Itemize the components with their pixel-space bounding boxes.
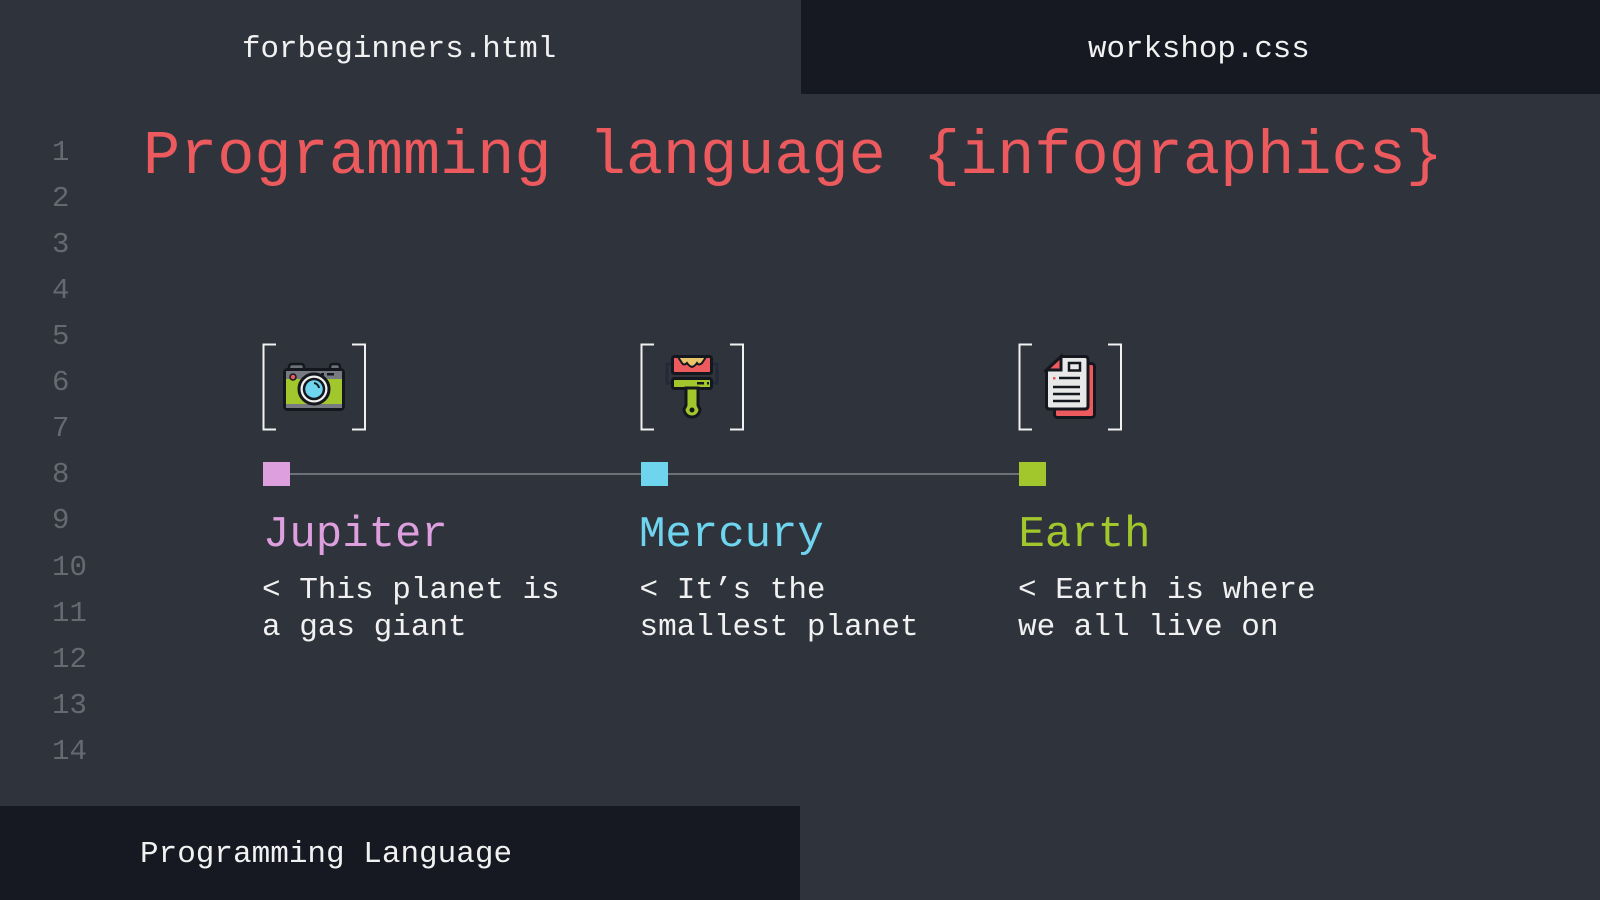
line numbers: 3 (52, 228, 70, 261)
footer label: Programming Language (140, 837, 512, 872)
icon: documents (1043, 353, 1096, 419)
line numbers: 12 (52, 643, 87, 676)
timeline connector (290, 473, 1020, 475)
line numbers: 13 (52, 689, 87, 722)
line numbers: 9 (52, 504, 70, 537)
tab: workshop.css (inactive, dark) (801, 0, 1600, 94)
line numbers: 6 (52, 366, 70, 399)
text: Jupiter description: < This planet is a gas giant (262, 572, 560, 645)
line numbers: 5 (52, 320, 70, 353)
tab label: workshop.css: workshop.css (1088, 32, 1310, 67)
heading: Jupiter: Jupiter (263, 510, 448, 560)
marker: Mercury (641, 462, 668, 486)
tab label: forbeginners.html: forbeginners.html (242, 32, 556, 67)
line numbers: 14 (52, 735, 87, 768)
text: Earth description: < Earth is where we all live on (1018, 572, 1316, 645)
line numbers: 2 (52, 182, 70, 215)
icon: camera (283, 362, 345, 411)
title: Programming language {infographics} (143, 121, 1443, 192)
line numbers: 1 (52, 136, 70, 169)
line numbers: 11 (52, 597, 87, 630)
text: Mercury description: < It’s the smallest planet (640, 572, 919, 645)
line numbers: 4 (52, 274, 70, 307)
icon: paint brush (666, 355, 718, 418)
line numbers (52, 136, 87, 768)
heading: Earth: Earth (1018, 510, 1151, 560)
marker: Earth (1019, 462, 1046, 486)
line numbers: 7 (52, 412, 70, 445)
line numbers: 8 (52, 458, 70, 491)
marker: Jupiter (263, 462, 290, 486)
footer bar (0, 806, 800, 900)
heading: Mercury: Mercury (639, 510, 824, 560)
line numbers: 10 (52, 551, 87, 584)
